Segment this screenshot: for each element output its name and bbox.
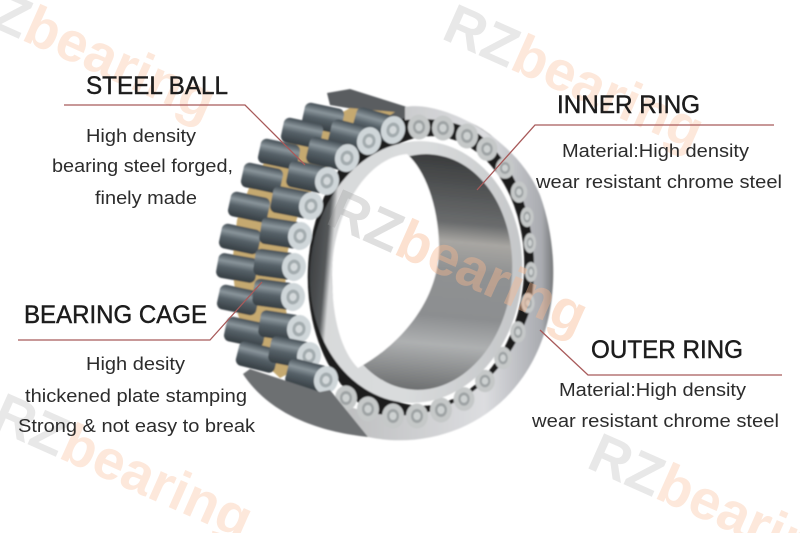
top shell of outer ring: [327, 89, 407, 122]
text: bearing cage description: thickened plate stamping: [25, 386, 247, 406]
leader line: steel ball: [64, 105, 305, 165]
text: inner ring description: wear resistant chrome steel: [535, 172, 782, 192]
heading: inner ring: INNER RING: [557, 91, 700, 119]
illustration: cylindrical roller bearing: [215, 89, 553, 440]
text: bearing cage description: [18, 354, 256, 436]
text: steel ball description: bearing steel forged,: [52, 156, 233, 176]
leader line: outer ring: [540, 330, 782, 375]
text: steel ball description: [52, 126, 233, 208]
text: steel ball description: finely made: [95, 188, 197, 208]
inner ring: [299, 132, 533, 412]
brass cage: [232, 108, 395, 378]
text: bearing cage description: High desity: [86, 354, 185, 374]
text: inner ring description: [535, 141, 782, 192]
back row rollers: [215, 102, 345, 374]
text: outer ring description: wear resistant chrome steel: [531, 411, 779, 431]
text: bearing cage description: Strong & not easy to break: [18, 416, 256, 436]
bottom shell of outer ring: [243, 369, 368, 437]
text: outer ring description: [531, 380, 779, 431]
outer ring: [323, 106, 553, 440]
bore interior: [322, 147, 522, 397]
dark gap behind small rollers: [309, 118, 545, 424]
text: steel ball description: High density: [86, 126, 196, 146]
front row rollers: [251, 106, 408, 396]
text: inner ring description: Material:High density: [562, 141, 749, 161]
small rollers: [335, 114, 537, 428]
text: outer ring description: Material:High density: [559, 380, 746, 400]
heading: outer ring: OUTER RING: [591, 336, 743, 364]
heading: steel ball: STEEL BALL: [86, 72, 228, 100]
heading: bearing cage: BEARING CAGE: [24, 301, 207, 329]
leader line: inner ring: [477, 125, 774, 190]
leader line: bearing cage: [18, 282, 262, 340]
white opening: [332, 154, 439, 368]
watermark: centre: RZbearing: [319, 176, 598, 347]
